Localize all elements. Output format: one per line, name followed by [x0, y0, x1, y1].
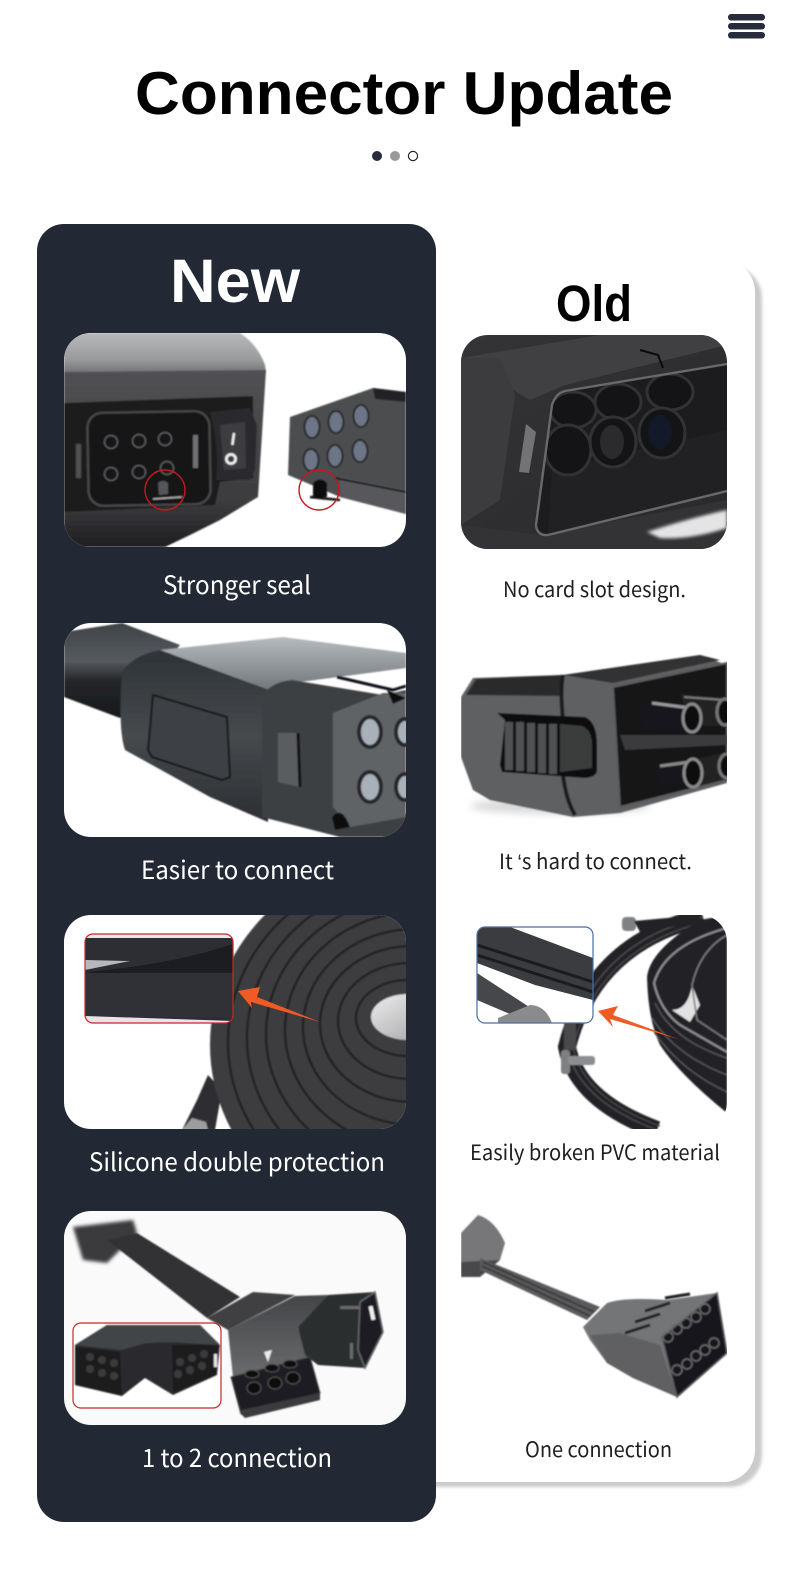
- caption: stronger seal: Stronger seal: [163, 566, 311, 602]
- title: Connector Update: [135, 60, 673, 127]
- slider latch: [497, 713, 597, 778]
- heading: old: Old: [556, 275, 632, 332]
- caption: silicone: Silicone double protection: [89, 1143, 385, 1179]
- inset: new cable close-up: [85, 934, 233, 1023]
- red circles: [145, 470, 339, 510]
- photo: new silicone cable coil: [64, 915, 406, 1129]
- caption: easier to connect: Easier to connect: [141, 851, 335, 887]
- photo: new 1 to 2 connector: [64, 1211, 406, 1425]
- caption: hard to connect: It ‘s hard to connect.: [499, 846, 692, 876]
- icon: menu: [728, 14, 765, 38]
- caption: PVC: Easily broken PVC material: [470, 1137, 720, 1167]
- caption: one connection: One connection: [525, 1434, 672, 1464]
- arrow: old inset: [598, 1006, 678, 1039]
- photo: new connector, easier to connect: [64, 623, 414, 837]
- panel: old: [400, 260, 762, 1487]
- photo: old one connection: [461, 1215, 727, 1397]
- arrow: new inset: [238, 987, 320, 1022]
- heading: new: New: [170, 247, 301, 315]
- caption: 1 to 2: 1 to 2 connection: [142, 1439, 332, 1475]
- caption: no card slot: No card slot design.: [503, 574, 686, 604]
- photo: old connector, no card slot: [461, 335, 727, 549]
- inset: old cable close-up: [477, 927, 593, 1023]
- inset: dual connector close-up: [73, 1323, 221, 1408]
- nozzles: [681, 694, 718, 726]
- photo: new connector, stronger seal: [64, 333, 406, 547]
- photo: old connector, hard to connect: [461, 655, 735, 817]
- photo: old PVC cable coil: [561, 915, 727, 1130]
- pagination dots: [372, 151, 418, 161]
- panel: new: [37, 224, 436, 1522]
